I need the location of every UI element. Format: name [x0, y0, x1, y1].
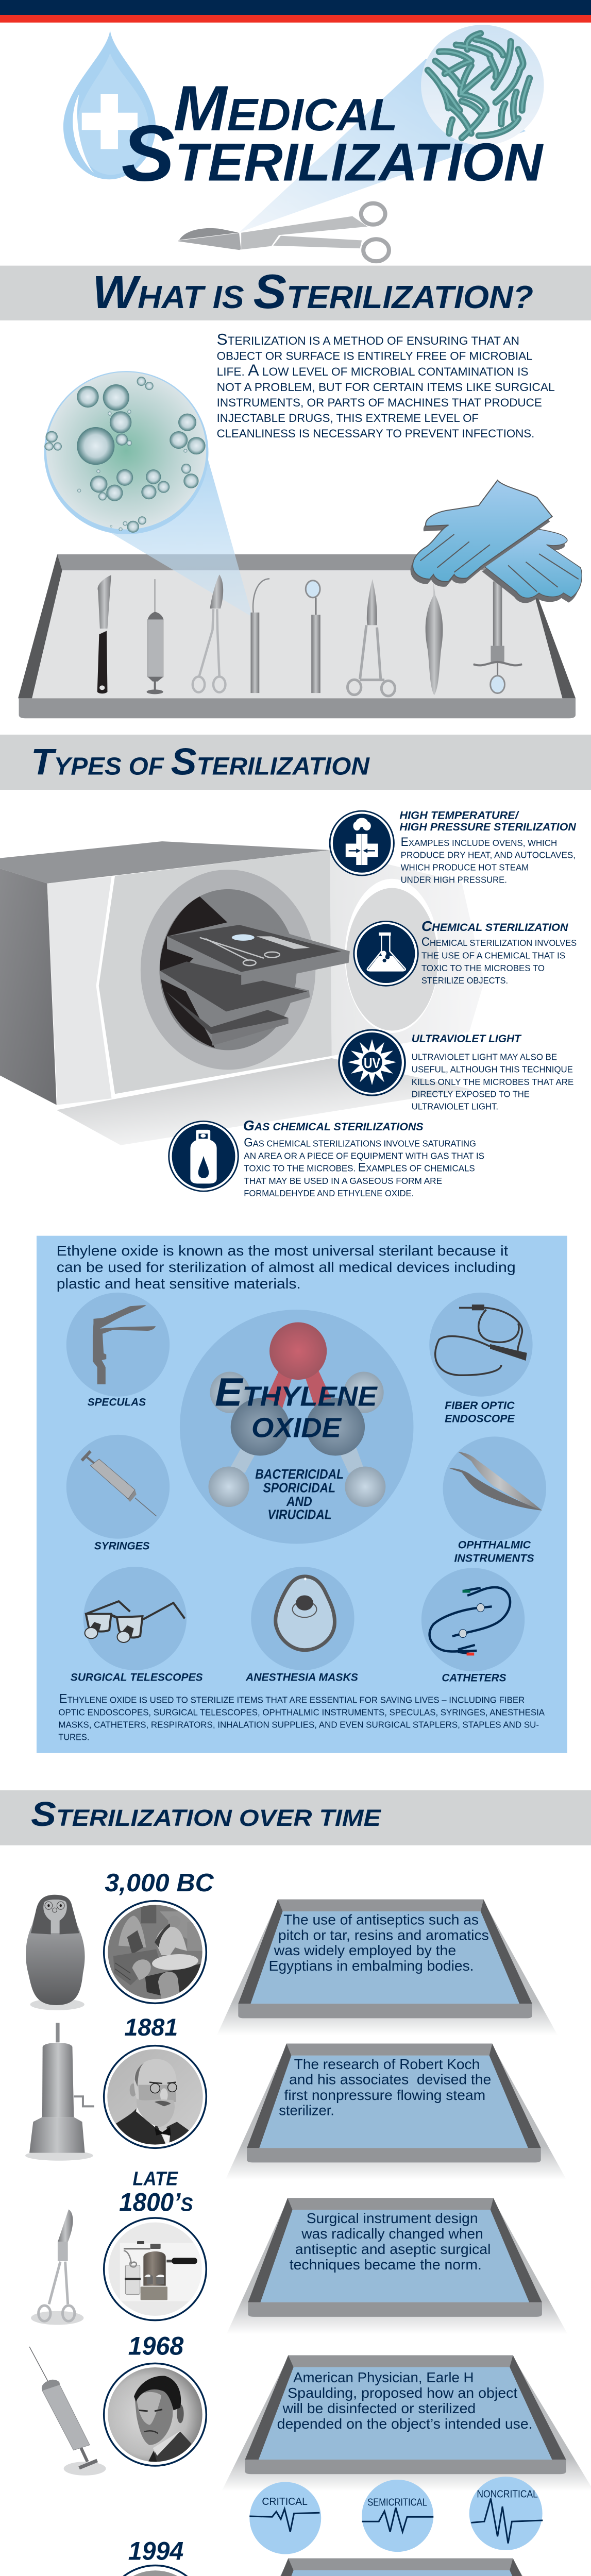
tray: robert koch: sterilizer. — [279, 2102, 334, 2119]
item: molecule badge: VIRUCIDAL — [267, 1508, 332, 1522]
tray: earle spaulding: American Physician, Earle H — [293, 2369, 474, 2386]
items below the fold of the panel — [58, 1435, 546, 1742]
band: types of sterilization — [0, 735, 591, 790]
text: gas chemical sterilizations: THAT MAY BE USED IN A GASEOUS FORM ARE — [244, 1176, 442, 1186]
item: surgical telescopes: SURGICAL TELESCOPES — [71, 1671, 203, 1684]
light beam from probe to petri dish — [107, 460, 252, 617]
tray: surgical instrument design: Surgical instrument design — [307, 2210, 478, 2227]
text: high temperature sterilization: UNDER HIGH PRESSURE. — [401, 875, 507, 885]
section: types of sterilization — [0, 735, 591, 1145]
item: ophthalmic instruments: INSTRUMENTS — [454, 1552, 534, 1565]
item: ophthalmic instruments — [443, 1436, 546, 1565]
icon: surgical scissors — [178, 204, 389, 261]
badge: noncritical — [469, 2477, 543, 2550]
icon: scissors — [31, 2209, 83, 2325]
text: chemical sterilization: STERILIZE OBJECTS. — [421, 975, 508, 986]
top header bars — [0, 0, 591, 23]
text: chemical sterilization — [421, 918, 577, 986]
title: MEDICAL — [173, 72, 398, 144]
icon: sarcophagus — [26, 1895, 85, 2010]
item: fiber optic endoscope: ENDOSCOPE — [445, 1413, 515, 1425]
photo: earle spaulding — [104, 2363, 206, 2466]
section: 1994 and calibration — [123, 2542, 522, 2576]
tray: earle spaulding: will be disinfected or sterilized — [282, 2400, 476, 2417]
text: ultraviolet light: ULTRAVIOLET LIGHT. — [412, 1101, 498, 1112]
item: anesthesia masks: ANESTHESIA MASKS — [245, 1671, 358, 1684]
badge: noncritical: NONCRITICAL — [477, 2488, 538, 2500]
photo: antique sterilizer — [104, 2218, 206, 2320]
instrument tray — [18, 554, 576, 718]
icon: water drop with cross — [63, 30, 156, 179]
magnified bacteria — [421, 25, 544, 145]
text: high temperature sterilization: HIGH TEMPERATURE/ — [399, 809, 519, 822]
item: fiber optic endoscope — [429, 1293, 533, 1425]
heading: sterilization over time: STERILIZATION OVER TIME — [31, 1795, 381, 1833]
band: sterilization over time — [0, 1790, 591, 1845]
text: ethylene oxide uses — [58, 1691, 545, 1742]
section: sterilization over time, upper — [0, 1790, 591, 2180]
item: molecule badge — [180, 1310, 413, 1544]
photo: egyptian embalmers — [104, 1901, 206, 2003]
text: gas chemical sterilizations: TOXIC TO THE MICROBES. EXAMPLES OF CHEMICALS — [244, 1160, 475, 1174]
icon: steam sterilizer — [25, 2023, 94, 2161]
badge: critical — [249, 2482, 321, 2554]
item: syringes: SYRINGES — [94, 1540, 149, 1552]
section: what is sterilization illustration — [18, 330, 582, 718]
date: 1994: 1994 — [128, 2537, 183, 2565]
tray: surgical instrument design: was radically changed when — [301, 2226, 483, 2242]
tray: surgical instrument design — [227, 2198, 568, 2334]
icon: syringe — [29, 2347, 106, 2476]
tray: robert koch — [225, 2044, 566, 2180]
item: molecule badge: OXIDE — [251, 1413, 342, 1444]
section: header and title — [0, 0, 591, 320]
icon: ultraviolet: UV — [364, 1055, 380, 1071]
item: molecule badge: BACTERICIDAL — [255, 1467, 344, 1482]
badge: semicritical: SEMICRITICAL — [367, 2496, 427, 2508]
text: gas chemical sterilizations — [243, 1117, 484, 1198]
section: sterilization over time, middle — [29, 2167, 591, 2554]
icon: chemical flask — [353, 921, 419, 987]
tray: egyptian antiseptics — [217, 1900, 558, 2036]
section: gas sterilization and ethylene oxide — [37, 1117, 567, 1753]
photo: william rutala — [123, 2565, 188, 2576]
photo: robert koch — [104, 2046, 206, 2148]
text: high temperature sterilization — [399, 809, 577, 885]
item: molecule badge: AND — [286, 1495, 312, 1509]
tray: egyptian antiseptics: was widely employed by the — [274, 1942, 456, 1959]
date: 1881: 1881 — [124, 2014, 178, 2041]
date: 1968: 1968 — [128, 2332, 183, 2361]
text: gas chemical sterilizations: FORMALDEHYDE AND ETHYLENE OXIDE. — [244, 1188, 414, 1198]
item: catheters — [421, 1568, 525, 1684]
item: catheters: CATHETERS — [442, 1672, 506, 1684]
item: ophthalmic instruments: OPHTHALMIC — [458, 1539, 531, 1551]
date: late 1800s: 1800’S — [119, 2188, 193, 2217]
surgical instruments — [97, 574, 522, 696]
item: anesthesia masks — [245, 1567, 358, 1684]
illustration: autoclave — [0, 841, 484, 1145]
tray: earle spaulding — [222, 2355, 591, 2492]
item: molecule badge: SPORICIDAL — [263, 1481, 335, 1495]
text: ethylene oxide intro — [57, 1243, 516, 1292]
text: sterilization definition — [217, 330, 555, 440]
icon: ultraviolet — [338, 1029, 406, 1096]
icon: high temperature and pressure — [329, 810, 395, 876]
item: molecule badge: ETHYLENE — [215, 1370, 378, 1415]
heading: types of sterilization: TYPES OF STERILIZATION — [31, 740, 370, 783]
text: gas chemical sterilizations: GAS CHEMICAL STERILIZATIONS — [243, 1117, 423, 1133]
text: ultraviolet light — [412, 1032, 573, 1112]
item: syringes — [66, 1435, 170, 1552]
badge: semicritical — [362, 2480, 433, 2552]
tray: robert koch: The research of Robert Koch — [294, 2056, 480, 2073]
item: fiber optic endoscope: FIBER OPTIC — [445, 1399, 515, 1412]
text: ethylene oxide intro: plastic and heat sensitive materials. — [57, 1276, 301, 1292]
petri dish with microbes — [44, 371, 209, 534]
text: ethylene oxide uses: TURES. — [58, 1732, 89, 1742]
text: ultraviolet light: ULTRAVIOLET LIGHT — [412, 1032, 522, 1045]
icon: gas cylinder — [168, 1121, 239, 1192]
light beam from scissors to microbes — [240, 59, 526, 232]
band: what is sterilization — [0, 266, 591, 320]
item: surgical telescopes — [71, 1567, 203, 1684]
icon: blue surgical gloves — [411, 480, 582, 603]
item: speculas — [66, 1293, 170, 1409]
date: 3000 BC: 3,000 BC — [105, 1869, 214, 1896]
date: late 1800s: LATE — [132, 2167, 178, 2190]
badge: critical: CRITICAL — [262, 2496, 308, 2507]
item: speculas: SPECULAS — [88, 1396, 146, 1409]
panel: ethylene oxide — [37, 1236, 567, 1753]
title — [122, 72, 544, 198]
date: late 1800s — [119, 2167, 193, 2217]
tray: william rutala — [222, 2558, 591, 2576]
